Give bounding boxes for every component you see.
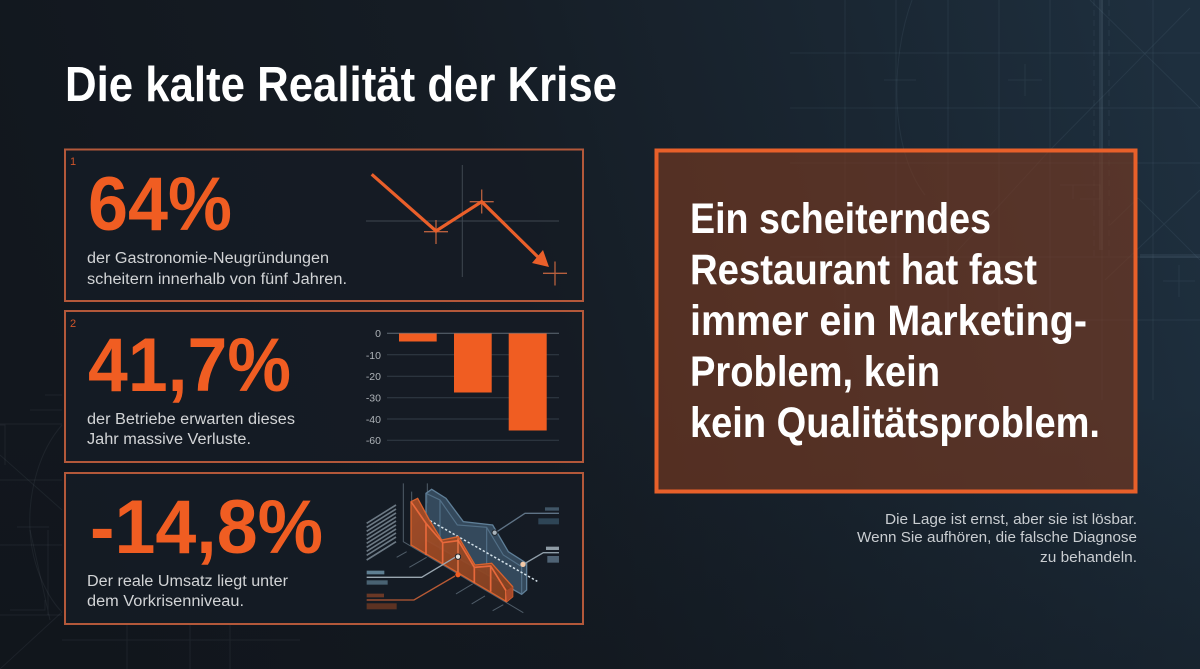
callout text: Restaurant hat fast: [690, 246, 1037, 294]
description: dem Vorkrisenniveau.: [87, 593, 244, 610]
closing note: zu behandeln.: [1040, 550, 1137, 566]
panel: stat 64%: [65, 150, 583, 301]
bar chart: 0: [375, 328, 381, 340]
line chart with falling arrow: [366, 165, 567, 286]
bar chart: -40: [366, 414, 381, 426]
description: [87, 411, 295, 448]
big number 41,7%: 41,7%: [88, 323, 291, 408]
big number 64%: 64%: [88, 162, 232, 247]
description: scheitern innerhalb von fünf Jahren.: [87, 271, 347, 288]
bar chart: -20: [366, 371, 381, 383]
panel number 1: 1: [70, 156, 76, 168]
title: Die kalte Realität der Krise: [65, 58, 617, 112]
big number -14,8%: -14,8%: [90, 485, 323, 570]
callout text: Problem, kein: [690, 348, 940, 396]
bar chart: -10: [366, 350, 381, 362]
callout text: [690, 195, 1100, 447]
closing note: Wenn Sie aufhören, die falsche Diagnose: [857, 530, 1137, 546]
callout: key message: [656, 150, 1136, 492]
closing note: [857, 512, 1137, 566]
description: Der reale Umsatz liegt unter: [87, 573, 288, 590]
panel: stat 41,7%: [65, 311, 583, 462]
description: der Betriebe erwarten dieses: [87, 411, 295, 428]
callout text: kein Qualitätsproblem.: [690, 399, 1100, 447]
description: [87, 573, 288, 610]
closing note: Die Lage ist ernst, aber sie ist lösbar.: [885, 512, 1137, 528]
callout text: Ein scheiterndes: [690, 195, 991, 243]
bar chart: -60: [366, 435, 381, 447]
isometric 3D chart: [367, 483, 559, 613]
callout text: immer ein Marketing-: [690, 297, 1087, 345]
blueprint pattern top right: [790, 0, 1200, 400]
description: Jahr massive Verluste.: [87, 431, 251, 448]
bar chart: -30: [366, 392, 381, 404]
description: der Gastronomie-Neugründungen: [87, 250, 329, 267]
panel: stat -14,8%: [65, 473, 583, 624]
panel number 2: 2: [70, 318, 76, 330]
blueprint pattern bottom left: [0, 395, 300, 669]
bar chart: [366, 328, 559, 447]
description: [87, 250, 347, 288]
